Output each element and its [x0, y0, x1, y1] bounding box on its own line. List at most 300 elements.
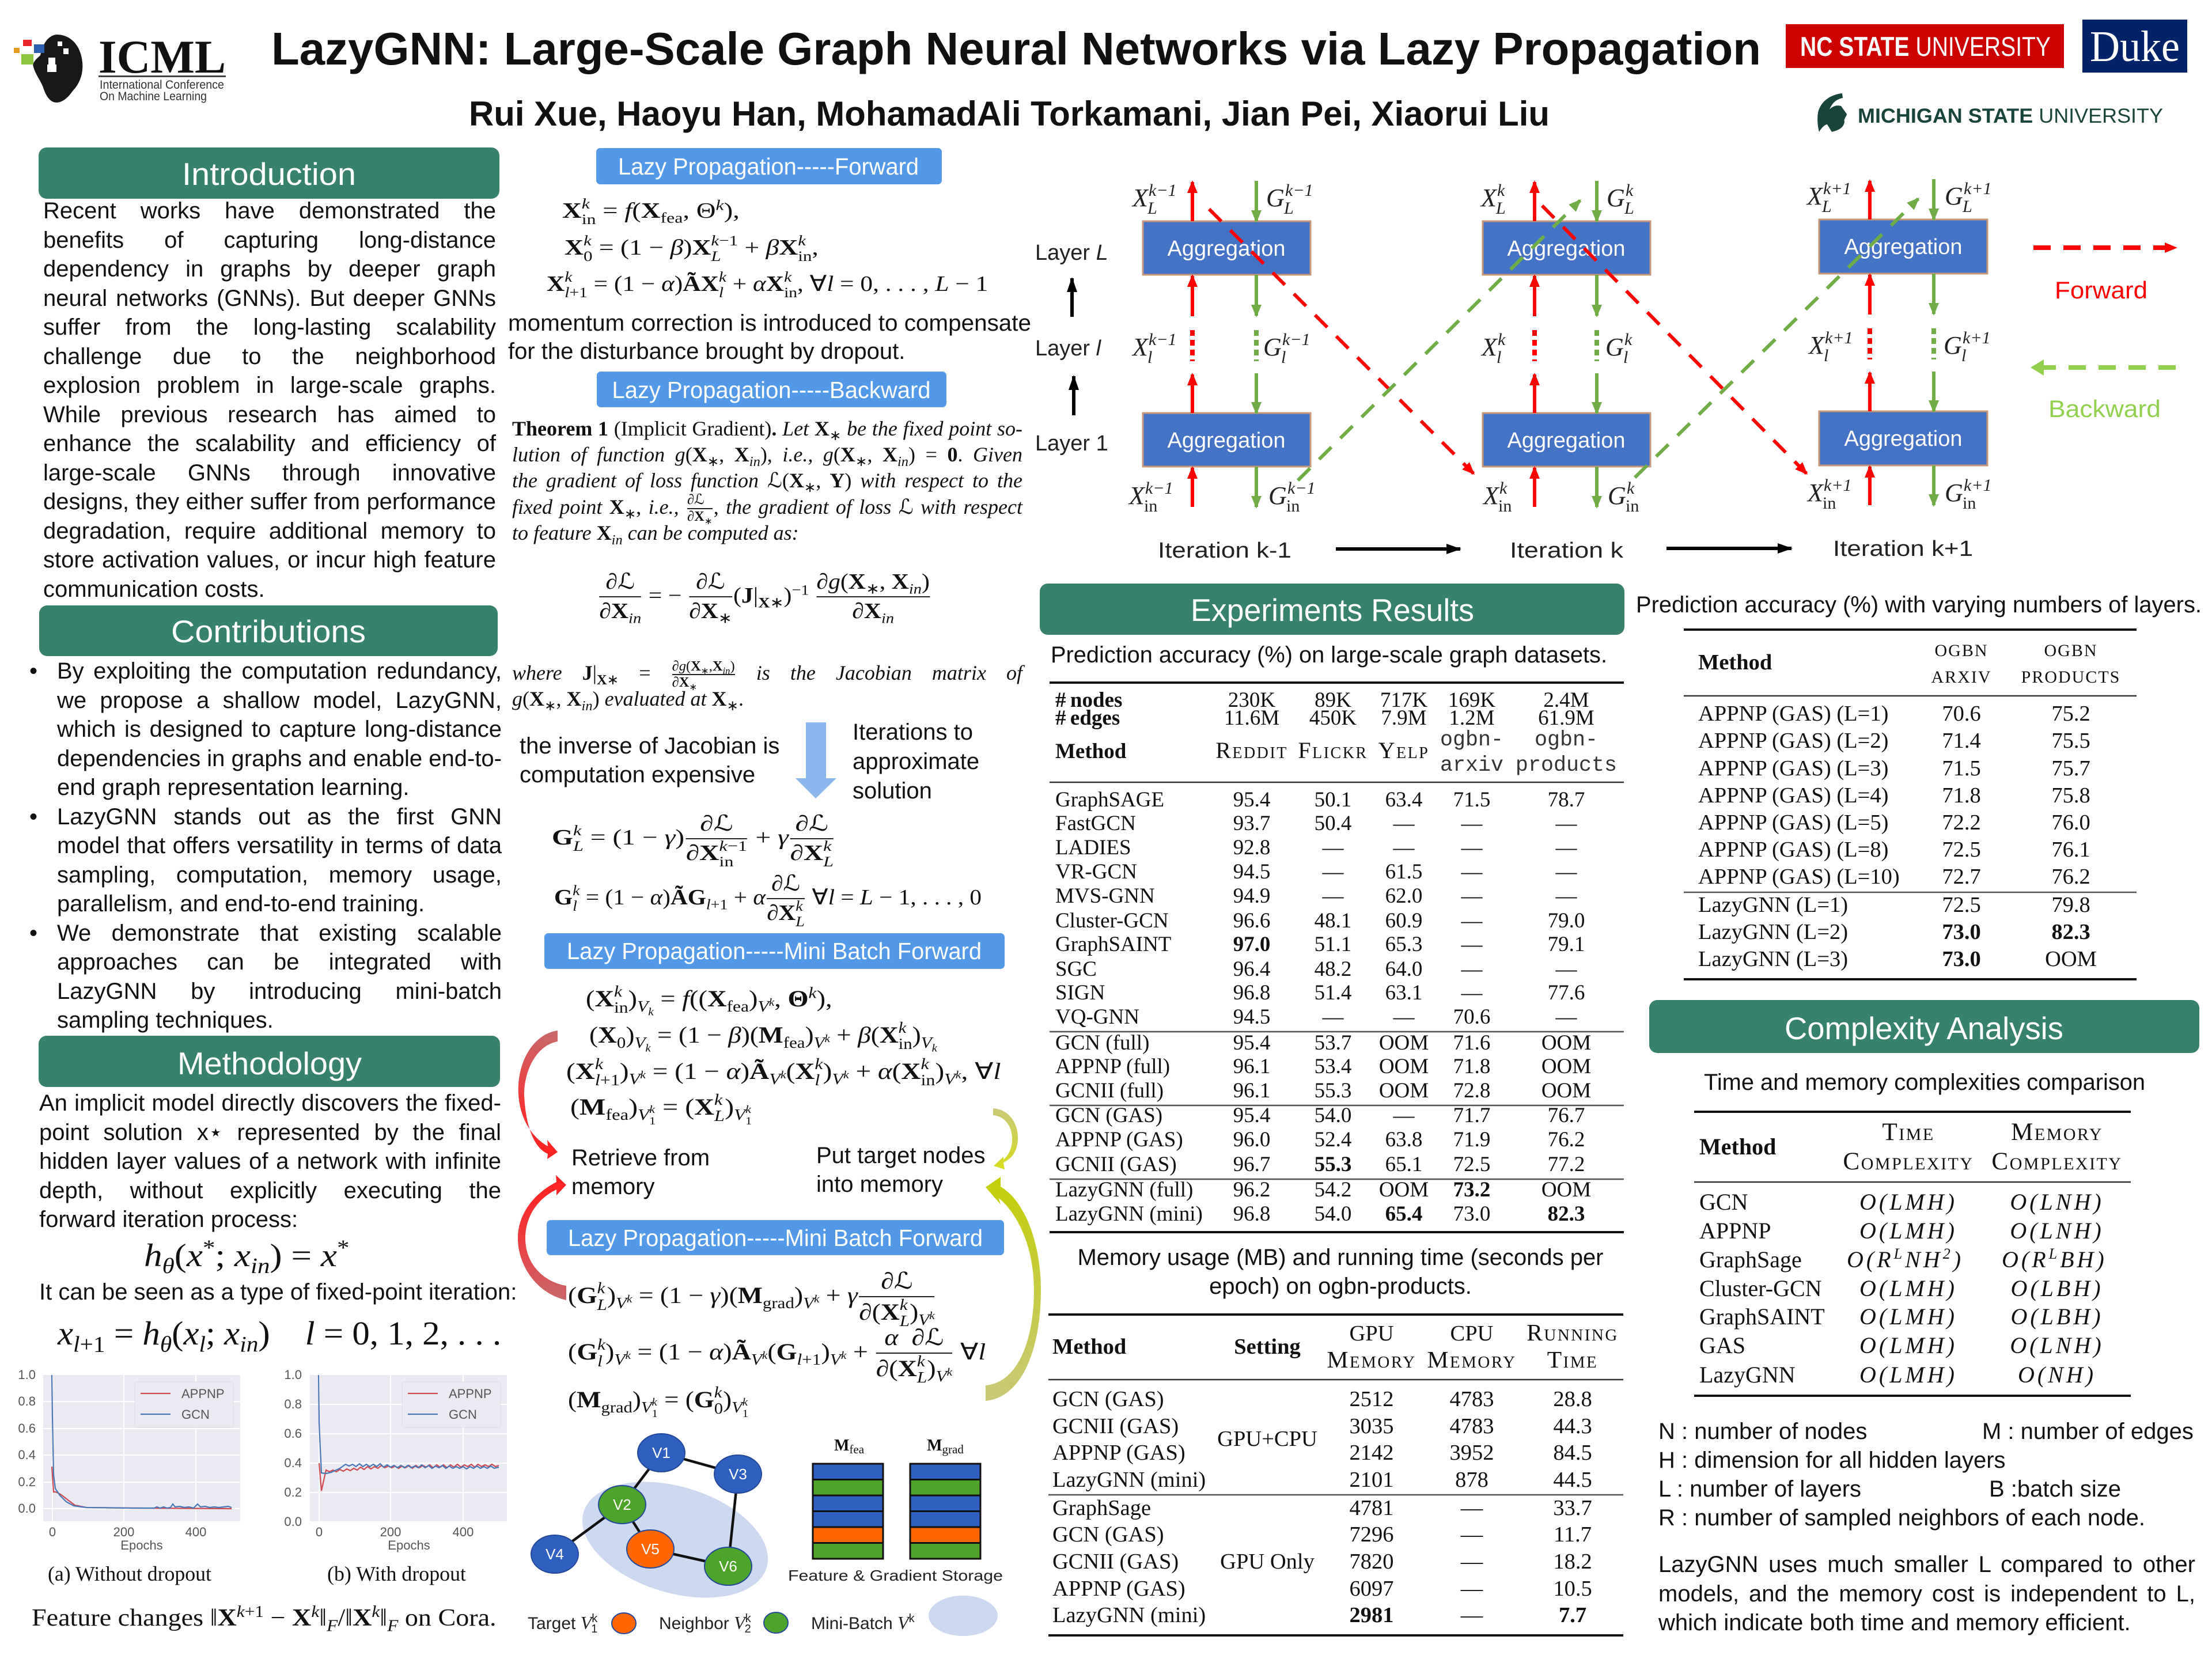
- table header: 89K: [1315, 688, 1351, 712]
- text: theorem: the gradient of loss function ℒ(X∗, Y) with respect to the: [512, 469, 1022, 496]
- table: memory usage and running time: epoch) on ogbn-products.: [1209, 1274, 1472, 1299]
- chart: feature changes without dropout: 200: [113, 1525, 134, 1539]
- formula: mini-batch forward 2: (X0)Vk = (1 − β)(Mfea)Vk + β(X )Vk: [589, 1022, 937, 1054]
- table: memory usage and running time: Memory usage (MB) and running time (seconds per: [1077, 1245, 1604, 1270]
- logo: ICML: ICML: [99, 31, 226, 83]
- text: 1: [649, 1115, 656, 1127]
- table rows: 70.6: [1453, 1005, 1490, 1029]
- table rows: 76.0: [2051, 810, 2090, 835]
- table rows: 84.5: [1553, 1441, 1592, 1465]
- section header: Introduction: Introduction: [182, 156, 356, 192]
- chart: feature changes with dropout: 200: [380, 1525, 401, 1539]
- text: ∂X: [790, 841, 823, 865]
- variable labels: G: [1608, 482, 1626, 510]
- table rows: 65.1: [1385, 1153, 1422, 1176]
- table header: 11.6M: [1224, 706, 1279, 730]
- legend: node types: k: [592, 1612, 598, 1625]
- variable labels: X: [1808, 331, 1825, 359]
- table rows: 4783: [1449, 1414, 1494, 1438]
- table header: Flickr: [1298, 737, 1368, 763]
- table rows: VQ-GNN: [1055, 1005, 1139, 1029]
- text: methodology paragraph: [39, 1090, 501, 1232]
- formula: mini-batch backward 2: (G )Vk = (1 − α)ÃVk(Gl+1)Vk + ∀l: [568, 1339, 986, 1368]
- section header: Complexity Analysis: [1649, 1000, 2199, 1053]
- table rows: LazyGNN (mini): [1052, 1603, 1206, 1627]
- variable labels: L: [1283, 199, 1294, 218]
- text: LazyGNN complexity conclusion: [1658, 1552, 2195, 1635]
- text: jacobian definition: [512, 658, 1025, 714]
- text: theorem: Theorem 1 (Implicit Gradient). Let X∗ be the fixed point so-: [512, 417, 1022, 444]
- table rows: GCNII (GAS): [1055, 1153, 1177, 1176]
- text: L: [823, 853, 834, 870]
- table rows: OOM: [1541, 1055, 1591, 1078]
- variable labels: l: [1497, 348, 1501, 367]
- text: jacobian definition: where J|X∗ = is the Jacobian matrix of: [512, 661, 1022, 688]
- table rows: 60.9: [1385, 909, 1422, 933]
- formula: mini-batch backward 2: k: [917, 1353, 925, 1370]
- text: introduction paragraph: While previous research has aimed to: [43, 402, 496, 427]
- aggregation boxes: Aggregation: [1508, 237, 1625, 261]
- variable labels: k+1: [1963, 328, 1991, 347]
- table rows: 2512: [1349, 1387, 1394, 1411]
- table rows: 76.2: [2051, 865, 2090, 889]
- chart: feature changes without dropout: 0.2: [18, 1475, 36, 1489]
- table rows: SIGN: [1055, 981, 1105, 1005]
- text: contributions list: LazyGNN by introducing mini-batch: [57, 978, 502, 1003]
- table rows: —: [1321, 836, 1344, 859]
- formula: mini-batch forward 4: (Mfea)V = (X )V: [570, 1094, 745, 1123]
- variable labels: l: [1824, 346, 1828, 365]
- text: momentum correction: for the disturbance brought by dropout.: [508, 339, 905, 364]
- chart: feature changes with dropout: 0.4: [284, 1456, 302, 1470]
- formula: fixed-point iteration: xl+1 = hθ(xl; xin) l = 0, 1, 2, . . .: [58, 1315, 501, 1357]
- text: contributions list: LazyGNN stands out as the first GNN: [57, 804, 502, 830]
- text: theorem: lution of function g(X∗, Xin), i.e., g(X∗, Xin) = 0. Given: [512, 443, 1022, 469]
- formula: gradient top layer: k: [573, 822, 581, 839]
- table rows: [1699, 1189, 2107, 1388]
- logo: ICML: International Conference: [100, 78, 224, 92]
- table rows: —: [1321, 860, 1344, 884]
- variable labels: X: [1128, 482, 1146, 510]
- table rows: —: [1461, 933, 1483, 956]
- chart: feature changes with dropout: [284, 1368, 507, 1552]
- section header: Introduction: [39, 147, 499, 199]
- text: methodology paragraph: depth, without explicitly executing the: [39, 1177, 501, 1203]
- variable labels: l: [1147, 348, 1152, 367]
- table rows: —: [1555, 884, 1577, 908]
- text: theorem: fixed point X∗, i.e., , the gradient of loss ℒ with respect: [512, 495, 1022, 522]
- text: introduction paragraph: large-scale GNNs through innovative: [43, 460, 496, 485]
- variable labels: k: [1499, 479, 1508, 498]
- iteration labels and arrows: Iteration k: [1510, 539, 1624, 563]
- table rows: GCNII (GAS): [1052, 1414, 1179, 1438]
- diagonal forward dashed arrows: [1209, 206, 1806, 474]
- chart: feature changes with dropout: 400: [453, 1525, 474, 1539]
- variable labels: X: [1131, 333, 1149, 361]
- table rows: —: [1555, 836, 1577, 859]
- table rows: 62.0: [1385, 884, 1422, 908]
- text: ∂ℒ: [795, 812, 828, 836]
- table rows: NH: [1904, 1247, 1943, 1272]
- formula: mini-batch forward 1: k: [614, 983, 622, 1000]
- table rows: 48.2: [1315, 957, 1351, 981]
- variable labels: L: [1495, 199, 1506, 218]
- table rows: 71.8: [1453, 1055, 1490, 1078]
- variable labels: l: [1623, 348, 1628, 367]
- diagram: lazy propagation iterations: [1035, 179, 2176, 563]
- table header: GPU: [1349, 1321, 1394, 1346]
- text: retrieve from memory: [571, 1145, 710, 1199]
- text: introduction paragraph: Recent works have demonstrated the: [43, 198, 496, 224]
- text: introduction paragraph: communication costs.: [43, 576, 265, 601]
- chart: feature changes without dropout: 0: [49, 1525, 56, 1539]
- table rows: APPNP (GAS) (L=4): [1698, 783, 1888, 808]
- table rows: 73.0: [1942, 947, 1981, 971]
- table rows: 63.4: [1385, 788, 1422, 812]
- variable labels: k+1: [1964, 179, 1992, 198]
- formula: forward 1: in: [582, 211, 596, 228]
- variable labels: X: [1480, 333, 1498, 361]
- text: ∂g(X∗, Xin): [816, 570, 930, 597]
- text: complexity notation legend: [1658, 1419, 2194, 1531]
- text: ∂ℒ: [881, 1268, 913, 1294]
- title: LazyGNN: Large-Scale Graph Neural Networks via Lazy Propagation: [271, 23, 1761, 74]
- variable labels: X: [1806, 479, 1824, 507]
- formula: forward 1: k: [582, 195, 590, 212]
- text: introduction paragraph: store activation values, or incur high feature: [43, 547, 496, 573]
- table rows: 65.3: [1385, 933, 1422, 956]
- layer labels: Layer 1: [1035, 431, 1108, 456]
- text: L: [917, 1369, 927, 1386]
- table rows: 7.7: [1559, 1603, 1586, 1627]
- iteration labels and arrows: Iteration k-1: [1158, 539, 1291, 563]
- variable labels: k: [1498, 330, 1506, 349]
- table rows: —: [1460, 1522, 1483, 1547]
- table rows: APPNP (GAS) (L=1): [1698, 702, 1888, 726]
- table rows: 72.5: [1942, 893, 1981, 917]
- table rows: GCNII (GAS): [1052, 1550, 1179, 1574]
- text: complexity notation legend: R : number of sampled neighbors of each node.: [1658, 1505, 2145, 1531]
- table rows: O(R: [1847, 1247, 1894, 1272]
- table rows: 73.2: [1453, 1178, 1490, 1202]
- diagram: feature and gradient storage: [788, 1437, 1003, 1584]
- formula: forward 2: X = (1 − β)X + βX ,: [565, 236, 819, 260]
- chart: feature changes without dropout: 0.8: [18, 1394, 36, 1408]
- variable labels: k: [1626, 181, 1634, 200]
- table rows: 73.0: [1942, 920, 1981, 944]
- table: prediction accuracy on large-scale datasets: [1050, 642, 1624, 1232]
- table header: ARXIV: [1931, 668, 1992, 687]
- chart: feature changes without dropout: 1.0: [18, 1368, 36, 1382]
- text: in: [719, 853, 734, 870]
- table rows: 96.7: [1233, 1153, 1270, 1176]
- text: contributions list: parallelism, and end-to-end training.: [57, 891, 425, 916]
- table rows: GraphSAINT: [1055, 933, 1171, 956]
- table rows: VR-GCN: [1055, 860, 1137, 884]
- table rows: GCN (full): [1055, 1031, 1149, 1055]
- table header: Yelp: [1378, 737, 1429, 763]
- text: introduction paragraph: degradation, require additional memory to: [43, 518, 496, 544]
- diagram: mini-batch graph: V5: [641, 1540, 660, 1558]
- text: methodology paragraph: hidden layer values of a network with infinite: [39, 1149, 501, 1174]
- formula: mini-batch forward 3: k: [815, 1055, 823, 1073]
- chart: feature changes without dropout: GCN: [181, 1407, 210, 1422]
- text: iterations to approximate: Iterations to: [853, 719, 973, 745]
- table header: [1698, 641, 2120, 687]
- table rows: 54.0: [1315, 1202, 1351, 1226]
- caption: feature changes on Cora: Feature changes ‖Xk+1 − Xk‖F/‖Xk‖F on Cora.: [32, 1603, 497, 1635]
- formula: forward 2: L: [711, 248, 721, 264]
- logo: ICML: [14, 31, 226, 103]
- formula: forward 2: in: [798, 248, 812, 264]
- formula: mini-batch backward 3: (Mgrad)V = (G )V: [568, 1387, 743, 1416]
- variable labels: in: [1823, 494, 1836, 513]
- logo: Michigan State University: [1817, 93, 2163, 132]
- table rows: 72.5: [1942, 838, 1981, 862]
- layer labels: Layer l: [1035, 336, 1102, 361]
- text: contributions list: dependencies in graphs and enable end-to-: [57, 745, 502, 771]
- chart: feature changes without dropout: 400: [185, 1525, 206, 1539]
- legend: backward: [2031, 359, 2176, 422]
- table rows: O(LBH): [2010, 1275, 2104, 1301]
- arrow: red retrieve upper: [518, 1031, 558, 1159]
- variable labels: G: [1268, 482, 1287, 510]
- text: iterations to approximate: approximate: [853, 749, 979, 774]
- aggregation boxes: [1143, 219, 1987, 467]
- text: 1: [743, 1408, 748, 1419]
- table rows: 7820: [1349, 1550, 1394, 1574]
- table header: 169K: [1448, 688, 1495, 712]
- formula: mini-batch forward 3: (X )Vk = (1 − α)ÃVk(X )Vk + α(X )Vk, ∀l: [566, 1058, 1001, 1088]
- formula: mini-batch forward 3: l+1: [595, 1071, 620, 1089]
- chart: feature changes with dropout: GCN: [449, 1407, 477, 1422]
- table: memory usage and running time: [1048, 1245, 1623, 1635]
- formula: mini-batch forward 2: k: [899, 1019, 906, 1036]
- formula: implicit gradient: [599, 570, 930, 627]
- aggregation boxes: Aggregation: [1508, 429, 1625, 453]
- table rows: O(LMH): [1859, 1189, 1957, 1215]
- logo: Michigan State University: MICHIGAN STATE UNIVERSITY: [1858, 105, 2163, 127]
- arrow: down to approximate solution: [796, 722, 836, 798]
- text: retrieve from memory: memory: [571, 1174, 654, 1199]
- variable labels: in: [1144, 497, 1157, 516]
- table rows: 53.4: [1315, 1055, 1351, 1078]
- text: ∂X∗: [689, 599, 732, 627]
- table rows: —: [1555, 812, 1577, 835]
- chart: feature changes without dropout: [18, 1368, 240, 1552]
- variable labels: G: [1605, 333, 1624, 361]
- table rows: —: [1393, 1005, 1415, 1029]
- formula: mini-batch forward 4: k: [745, 1104, 751, 1115]
- header: Lazy Propagation Forward: [596, 148, 942, 184]
- table rows: GPU+CPU: [1217, 1427, 1317, 1451]
- layer labels: Layer L: [1035, 241, 1108, 265]
- table rows: 6097: [1349, 1577, 1394, 1601]
- chart: feature changes with dropout: 0.8: [284, 1397, 302, 1411]
- text: introduction paragraph: benefits of capturing long-distance: [43, 227, 496, 252]
- table rows: OOM: [1379, 1079, 1429, 1103]
- table rows: —: [1555, 957, 1577, 981]
- variable labels: L: [1624, 199, 1634, 218]
- section header: Experiments Results: Experiments Results: [1191, 592, 1474, 628]
- diagram: feature and gradient storage: Feature & Gradient Storage: [788, 1567, 1003, 1584]
- variable labels: l: [1961, 346, 1966, 365]
- table rows: 82.3: [2051, 920, 2090, 944]
- formula: forward 3: l: [719, 284, 724, 301]
- table header: arxiv: [1440, 753, 1503, 778]
- table rows: 94.5: [1233, 1005, 1270, 1029]
- table rows: APPNP (GAS): [1052, 1441, 1185, 1465]
- table rows: 79.0: [1548, 909, 1585, 933]
- legend: node types: 1: [591, 1623, 597, 1635]
- diagram: mini-batch graph: [531, 1434, 782, 1619]
- table rows: GCN (GAS): [1052, 1522, 1164, 1547]
- header: Lazy Propagation Backward: [597, 372, 946, 407]
- formula: implicit gradient: = − (J|X∗)−1: [649, 581, 809, 611]
- table rows: L: [2048, 1245, 2060, 1262]
- table rows: O(LMH): [1859, 1362, 1957, 1388]
- table rows: 75.7: [2051, 756, 2090, 781]
- legend: forward: Forward: [2055, 276, 2147, 304]
- text: LazyGNN complexity conclusion: LazyGNN uses much smaller L compared to other: [1658, 1552, 2195, 1577]
- table rows: 28.8: [1553, 1387, 1592, 1411]
- variable labels: [1128, 179, 1992, 516]
- table rows: APPNP (GAS): [1055, 1128, 1183, 1152]
- chart: feature changes with dropout: 0.0: [284, 1514, 302, 1529]
- formula: mini-batch forward 4: k: [714, 1091, 722, 1108]
- chart: feature changes with dropout: 0: [316, 1525, 323, 1539]
- variable labels: L: [1147, 199, 1157, 218]
- text: ∂ℒ: [696, 570, 725, 594]
- text: complexity notation legend: M : number of edges: [1982, 1419, 2194, 1444]
- layer labels: [1035, 241, 1108, 456]
- table rows: —: [1555, 1005, 1577, 1029]
- table rows: 70.6: [1942, 702, 1981, 726]
- table rows: O(LNH): [2010, 1332, 2104, 1358]
- table rows: 96.1: [1233, 1055, 1270, 1078]
- chart: feature changes with dropout: APPNP: [449, 1387, 492, 1401]
- table rows: 51.1: [1315, 933, 1351, 956]
- formula: mini-batch backward 2: [568, 1324, 986, 1386]
- table header: 7.9M: [1381, 706, 1427, 730]
- table rows: 4783: [1449, 1387, 1494, 1411]
- table rows: 33.7: [1553, 1496, 1592, 1520]
- text: introduction paragraph: [43, 198, 497, 601]
- formula: mini-batch forward 3: k: [595, 1055, 603, 1073]
- table rows: —: [1461, 957, 1483, 981]
- table rows: 72.8: [1453, 1079, 1490, 1103]
- table rows: ): [1952, 1247, 1964, 1272]
- table rows: —: [1321, 884, 1344, 908]
- text: contributions list: sampling techniques.: [57, 1007, 274, 1033]
- section header: Methodology: [39, 1036, 500, 1087]
- table rows: 71.5: [1453, 788, 1490, 812]
- table rows: OOM: [1379, 1031, 1429, 1055]
- table rows: APPNP (GAS) (L=10): [1698, 865, 1900, 889]
- table header: Time: [1882, 1119, 1935, 1146]
- table rows: 78.7: [1548, 788, 1585, 812]
- text: contributions list: sampling, computation, memory usage,: [57, 862, 502, 887]
- section header: Complexity Analysis: Complexity Analysis: [1785, 1010, 2063, 1046]
- variable labels: k+1: [1964, 476, 1992, 495]
- table rows: OOM: [1541, 1079, 1591, 1103]
- variable labels: G: [1945, 479, 1963, 507]
- table rows: 71.5: [1942, 756, 1981, 781]
- table header: [1052, 1319, 1619, 1373]
- table header: Setting: [1234, 1335, 1301, 1359]
- table header: # edges: [1055, 706, 1120, 730]
- table rows: 75.8: [2051, 783, 2090, 808]
- table rows: —: [1321, 1005, 1344, 1029]
- formula: mini-batch forward 1: in: [614, 999, 628, 1016]
- formula: mini-batch backward 3: k: [743, 1396, 748, 1408]
- text: methodology paragraph: An implicit model directly discovers the fixed-: [39, 1090, 501, 1116]
- table rows: Cluster-GCN: [1055, 909, 1169, 933]
- table rows: GCN (GAS): [1055, 1104, 1162, 1127]
- table rows: GraphSage: [1699, 1247, 1802, 1272]
- text: jacobian definition: ∂X∗: [672, 675, 697, 692]
- formula: gradient layer l: k: [796, 897, 803, 914]
- table rows: —: [1460, 1577, 1483, 1601]
- table rows: 4781: [1349, 1496, 1394, 1520]
- text: contributions list: approaches can be integrated with: [57, 949, 502, 975]
- table header: Memory: [1327, 1346, 1416, 1373]
- aggregation boxes: Aggregation: [1168, 429, 1285, 453]
- table header: Complexity: [1991, 1148, 2123, 1175]
- variable labels: in: [1286, 497, 1300, 516]
- formula: mini-batch backward 1: k: [597, 1279, 605, 1297]
- table rows: 96.2: [1233, 1178, 1270, 1202]
- legend: node types: k: [909, 1612, 915, 1625]
- table header: Reddit: [1215, 737, 1288, 763]
- text: introduction paragraph: neural networks (GNNs). But deeper GNNs: [43, 286, 496, 311]
- chart: feature changes without dropout: APPNP: [181, 1387, 225, 1401]
- table rows: 77.2: [1548, 1153, 1585, 1176]
- variable labels: L: [1821, 197, 1832, 216]
- text: contributions list: [29, 658, 502, 1033]
- formula: mini-batch backward 1: k: [900, 1296, 908, 1313]
- table rows: LazyGNN (mini): [1055, 1202, 1203, 1226]
- aggregation boxes: Aggregation: [1168, 237, 1285, 261]
- table header: [1699, 1119, 2123, 1175]
- table: accuracy with varying layers: Prediction accuracy (%) with varying numbers of layers.: [1636, 592, 2202, 618]
- variable labels: L: [1962, 197, 1972, 216]
- variable labels: k+1: [1825, 328, 1853, 347]
- table rows: 2101: [1349, 1468, 1394, 1492]
- text: retrieve from memory: Retrieve from: [571, 1145, 710, 1171]
- logo: NC State University: NC STATE UNIVERSITY: [1800, 31, 2051, 62]
- table header: 2.4M: [1543, 688, 1589, 712]
- table rows: LazyGNN (L=3): [1698, 947, 1848, 971]
- table rows: O(LBH): [2010, 1304, 2104, 1330]
- table rows: GCN: [1699, 1189, 1748, 1215]
- formula: mini-batch forward 1: (X )Vk = f((Xfea)Vk, Θk),: [586, 984, 832, 1017]
- table rows: APPNP (GAS): [1052, 1577, 1185, 1601]
- formula: mini-batch forward 3: in: [921, 1071, 935, 1089]
- formula: gradient top layer: L: [573, 838, 584, 854]
- formula: gradient layer l: [554, 872, 982, 930]
- table rows: 72.2: [1942, 810, 1981, 835]
- table rows: 52.4: [1315, 1128, 1351, 1152]
- table rows: OOM: [2045, 947, 2097, 971]
- formula: mini-batch backward 1: L: [597, 1296, 607, 1313]
- table rows: 96.6: [1233, 909, 1270, 933]
- table rows: GraphSAGE: [1055, 788, 1164, 812]
- table rows: O(LMH): [1859, 1332, 1957, 1358]
- table rows: LazyGNN (L=2): [1698, 920, 1848, 944]
- table rows: —: [1460, 1496, 1483, 1520]
- text: theorem: [512, 417, 1023, 548]
